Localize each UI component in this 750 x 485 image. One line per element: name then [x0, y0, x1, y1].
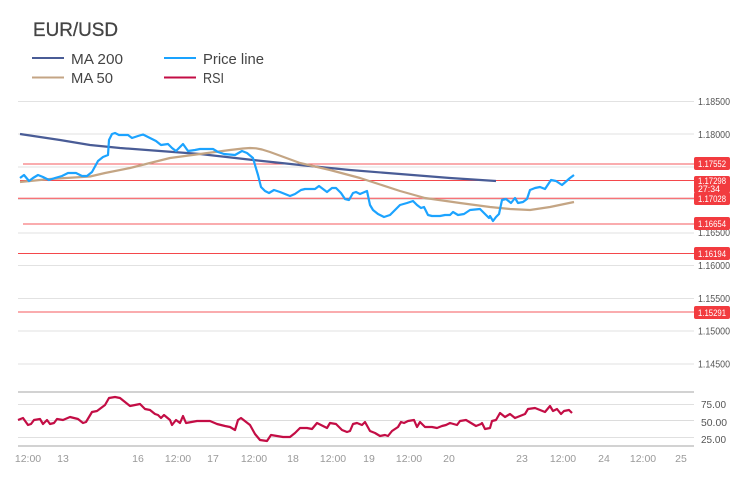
time axis labels	[15, 453, 687, 465]
badge 1.17298 countdown	[694, 176, 730, 195]
RSI axis labels: 25.00	[701, 434, 726, 446]
legend item: RSI	[164, 71, 224, 87]
price axis labels: 1.15500	[698, 293, 730, 305]
badge 1.15291: 1.15291	[698, 308, 726, 319]
time axis labels: 19	[363, 453, 375, 465]
legend item: MA 50	[32, 71, 113, 87]
time axis labels: 16	[132, 453, 144, 465]
time axis labels: 12:00	[396, 453, 422, 465]
legend item: MA 50: MA 50	[71, 71, 113, 87]
price line	[20, 133, 574, 221]
legend item: Price line	[164, 52, 264, 68]
time axis labels: 12:00	[320, 453, 346, 465]
time axis labels: 12:00	[630, 453, 656, 465]
price axis labels: 1.16500	[698, 227, 730, 239]
badge 1.16194: 1.16194	[698, 249, 726, 260]
legend item: MA 200	[32, 52, 123, 68]
legend item: RSI: RSI	[203, 71, 224, 87]
RSI line	[18, 397, 572, 441]
RSI panel frame and grid	[18, 392, 694, 446]
badge 1.17298 countdown: 27:34	[698, 184, 720, 195]
RSI axis labels: 50.00	[701, 417, 727, 429]
MA 200 line	[20, 134, 496, 181]
RSI axis labels	[701, 399, 727, 446]
time axis labels: 12:00	[241, 453, 267, 465]
title: EUR/USD	[33, 20, 118, 41]
time axis labels: 12:00	[550, 453, 576, 465]
time axis labels: 18	[287, 453, 299, 465]
price axis labels: 1.18500	[698, 96, 730, 108]
time axis labels: 13	[57, 453, 69, 465]
legend item: Price line: Price line	[203, 52, 264, 68]
price axis labels: 1.18000	[698, 129, 730, 141]
time axis labels: 12:00	[165, 453, 191, 465]
badge 1.17298 countdown: 1.17298	[698, 176, 726, 187]
price axis labels: 1.16000	[698, 260, 730, 272]
legend	[32, 52, 264, 87]
badge 1.16654: 1.16654	[698, 219, 726, 230]
legend item: MA 200: MA 200	[71, 52, 123, 68]
time axis labels: 17	[207, 453, 219, 465]
support and resistance lines	[18, 164, 694, 312]
badge 1.17552: 1.17552	[698, 159, 726, 170]
time axis labels: 20	[443, 453, 455, 465]
RSI axis labels: 75.00	[701, 399, 726, 411]
time axis labels: 23	[516, 453, 528, 465]
price badges	[694, 157, 730, 319]
price axis labels: 1.15000	[698, 326, 730, 338]
time axis labels: 12:00	[15, 453, 41, 465]
badge 1.17028: 1.17028	[698, 194, 726, 205]
MA 50 line	[20, 148, 574, 210]
time axis labels: 25	[675, 453, 687, 465]
price axis labels: 1.14500	[698, 358, 730, 370]
time axis labels: 24	[598, 453, 610, 465]
price grid lines	[18, 102, 694, 364]
price axis labels	[698, 96, 730, 370]
